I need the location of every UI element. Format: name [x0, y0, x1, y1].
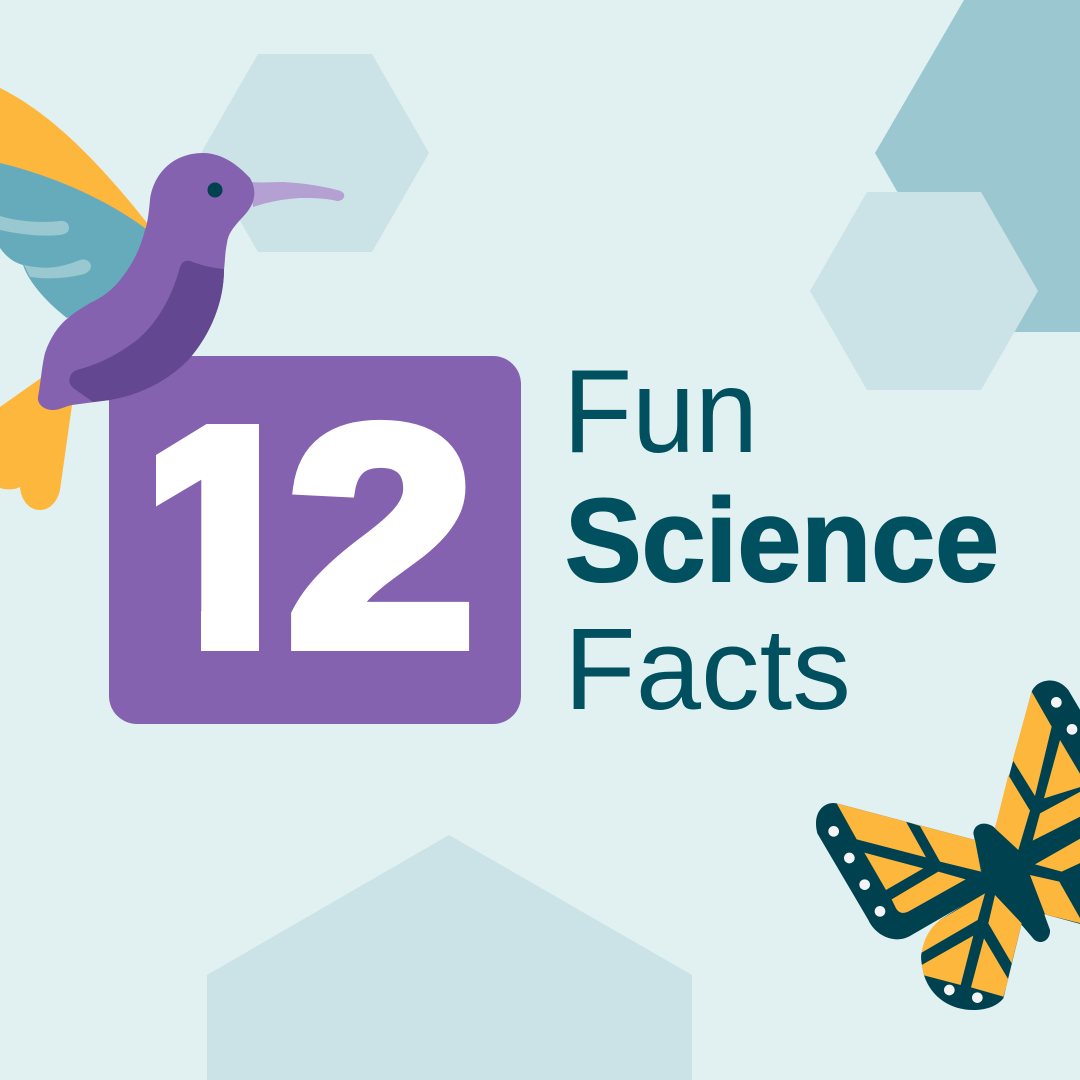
- icon: butterfly: [816, 680, 1080, 1010]
- hummingbird eye: [208, 182, 222, 198]
- hummingbird body: [38, 153, 254, 410]
- icon: hummingbird: [0, 88, 344, 510]
- background hexagon: right light: [810, 192, 1038, 390]
- panel background: [109, 356, 521, 724]
- hummingbird yellow wing: [0, 88, 147, 240]
- title: 12 Fun Science Facts: Fun: [563, 345, 758, 478]
- title: 12 Fun Science Facts: [563, 345, 999, 734]
- butterfly white wing dots: [828, 697, 1077, 1003]
- hummingbird teal wing: [0, 163, 146, 318]
- wing streaks: [0, 216, 91, 278]
- title: 12 Fun Science Facts: Science: [565, 475, 999, 607]
- number 12: 1: [129, 361, 318, 720]
- butterfly lower wing panels: [922, 893, 1022, 997]
- butterfly right wing panels: [995, 692, 1080, 924]
- hummingbird beak: [251, 182, 344, 207]
- background hexagon: bottom: [207, 835, 692, 1080]
- number panel: [109, 356, 521, 724]
- title: 12 Fun Science Facts: Facts: [564, 604, 851, 734]
- number 12: 2: [287, 362, 475, 710]
- hummingbird tail: [0, 378, 72, 510]
- background hexagon: top right teal: [875, 0, 1080, 332]
- butterfly dark wing frames: [816, 680, 1080, 1010]
- background hexagon: top centre: [201, 54, 429, 252]
- number 12: [156, 420, 470, 651]
- hummingbird dark breast: [69, 261, 224, 402]
- butterfly left forewing panels: [837, 803, 981, 913]
